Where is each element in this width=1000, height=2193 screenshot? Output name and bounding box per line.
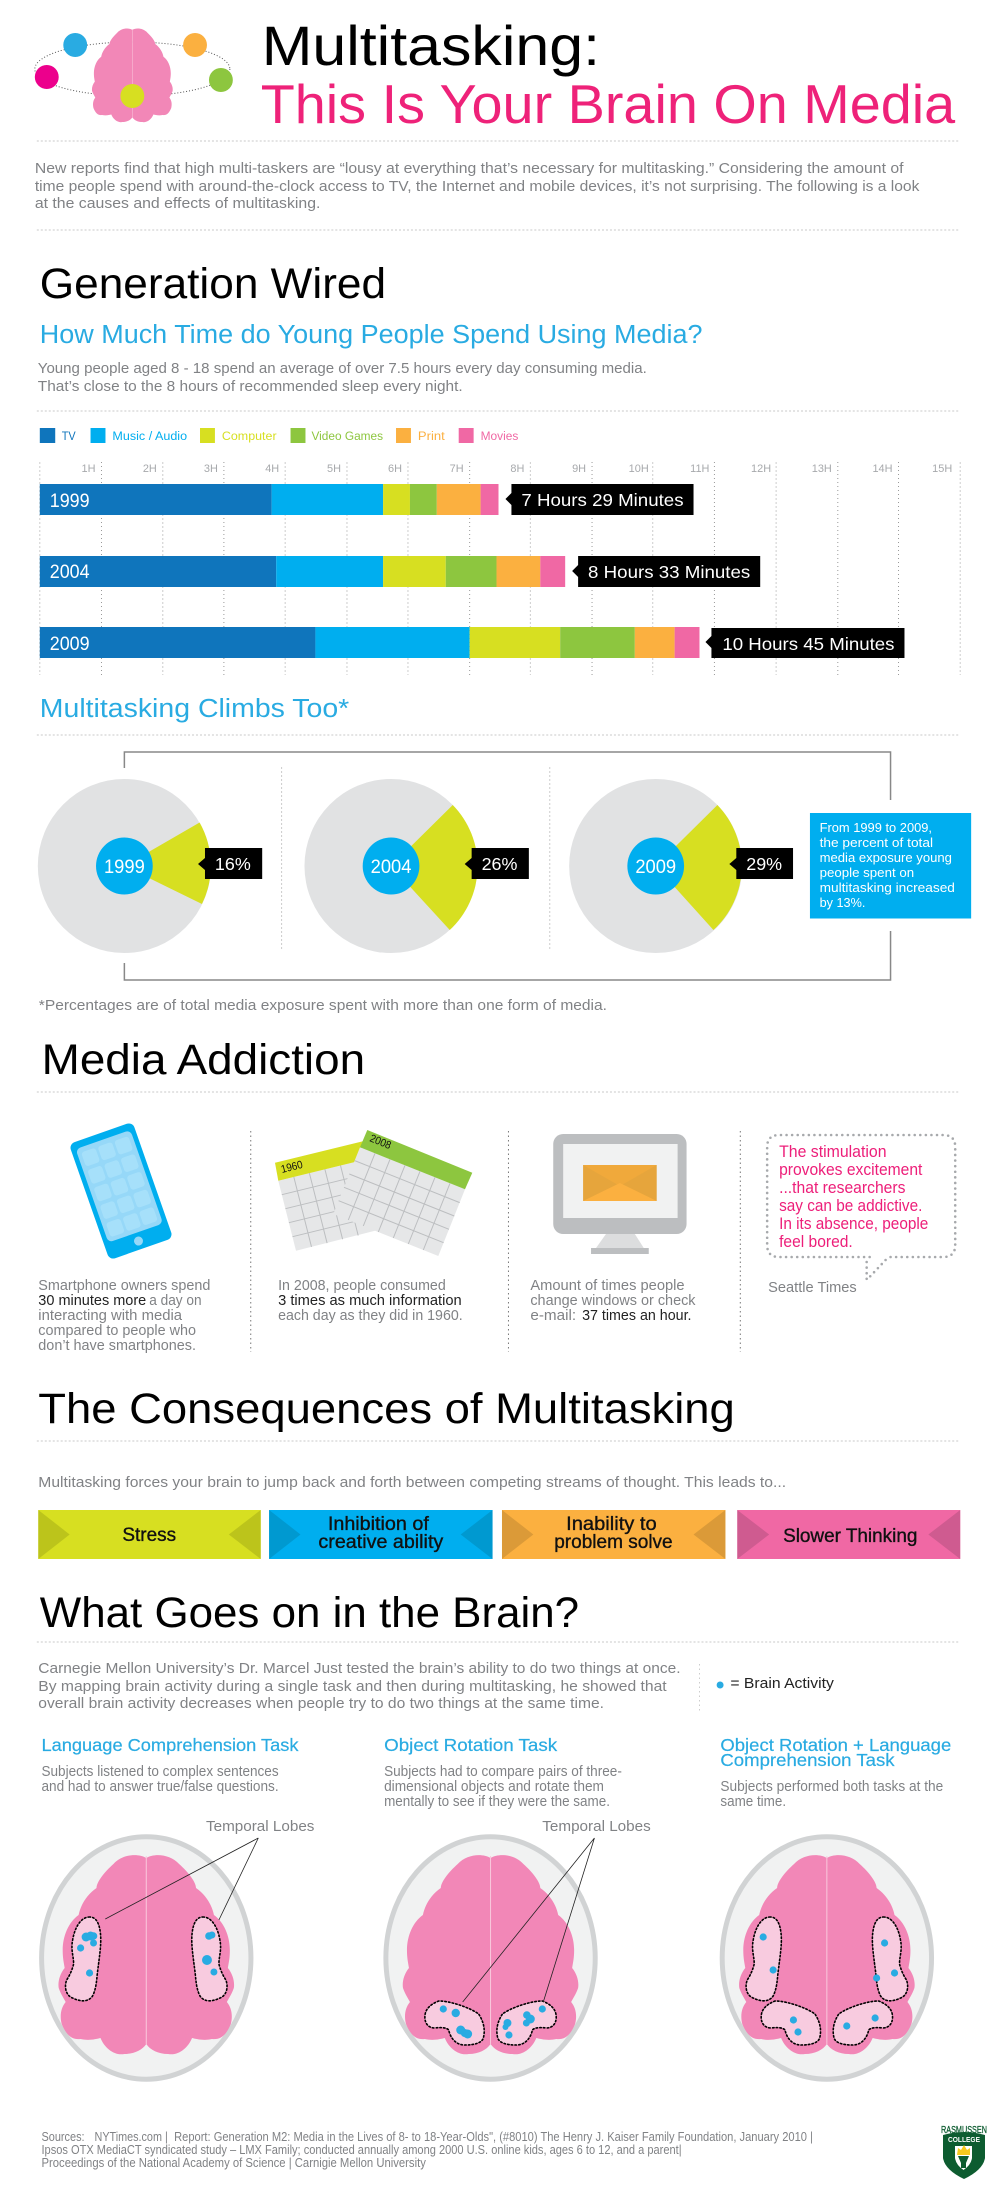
- text block: window changes: [530, 1278, 696, 1324]
- bar: 2004: 8 Hours 33 Minutes: [588, 562, 750, 582]
- intro text block: at the causes and effects of multitasking.: [35, 196, 320, 212]
- text block: window changes: change windows or check: [530, 1293, 696, 1309]
- bar chart: daily media hours: 4H: [265, 463, 279, 475]
- legend: brain activity: = Brain Activity: [730, 1676, 835, 1692]
- title: [261, 14, 956, 135]
- pie: 1999 16%: 16%: [215, 854, 251, 874]
- brain diagram: rotation task: [386, 1837, 595, 2079]
- sources footer: [41, 2130, 813, 2170]
- text block: 3 times as much: In 2008, people consumed: [278, 1278, 446, 1294]
- panel: combined task: same time.: [720, 1794, 786, 1810]
- text block: media hours: [38, 361, 647, 395]
- panel: object rotation task: mentally to see if they were the same.: [384, 1794, 610, 1810]
- sources footer: Proceedings of the National Academy of Science | Carnigie Mellon University: [41, 2156, 427, 2170]
- icon: smartphone: [69, 1122, 173, 1260]
- legend: Computer: [222, 429, 277, 443]
- bracket connecting pies: [124, 752, 891, 980]
- pie: 2004 26%: 2004: [371, 857, 411, 878]
- heading: The Consequences of Multitasking: The Consequences of Multitasking: [38, 1385, 735, 1433]
- bar: 2004: [40, 556, 760, 587]
- bar: 2009: 2009: [50, 634, 90, 655]
- bar chart: daily media hours: 12H: [751, 463, 771, 475]
- callout: 13% increase: media exposure young: [820, 850, 952, 865]
- icon: monitor with envelope: [553, 1134, 687, 1254]
- text block: Carnegie Mellon: Carnegie Mellon University’s Dr. Marcel Just tested the brain’s ability to do two things at once.: [38, 1661, 681, 1677]
- banner: Inhibition of creative ability: creative ability: [318, 1532, 444, 1553]
- bar chart: daily media hours: 5H: [327, 463, 341, 475]
- footnote: *Percentages are of total media exposure spent with more than one form of media.: [39, 998, 607, 1014]
- text block: smartphone owners: a day on: [149, 1293, 202, 1309]
- sources footer: Ipsos OTX MediaCT syndicated study – LMX Family; conducted annually among 2000 U.S. online kids, ages 6 to 12, and a parent|: [41, 2143, 682, 2157]
- pie: 1999 16%: 1999: [104, 857, 145, 878]
- bar: 2009: 10 Hours 45 Minutes: [722, 634, 895, 654]
- intro text block: [35, 161, 920, 212]
- pie: 1999 16%: [38, 779, 262, 953]
- panel: language comprehension task: Subjects listened to complex sentences: [41, 1764, 279, 1780]
- panel: object rotation task: dimensional objects and rotate them: [384, 1779, 604, 1795]
- panel: language comprehension task: [41, 1735, 314, 2079]
- bar: 1999: 1999: [50, 491, 90, 512]
- subheading: how much time: How Much Time do Young People Spend Using Media?: [40, 321, 702, 349]
- bar: 2009: [40, 627, 904, 658]
- text block: 3 times as much: each day as they did in 1960.: [278, 1308, 463, 1324]
- bar chart: daily media hours: 1H: [82, 463, 96, 475]
- text block: media hours: That’s close to the 8 hours of recommended sleep every night.: [38, 379, 463, 395]
- speech bubble: quote: ...that researchers: [779, 1178, 905, 1197]
- callout: 13% increase: by 13%.: [820, 895, 865, 910]
- banner: Inability to problem solve: Inability to: [566, 1514, 657, 1535]
- brain diagram: language task: [42, 1837, 258, 2079]
- legend: Movies: [481, 429, 518, 443]
- speech bubble: quote: In its absence, people: [779, 1214, 928, 1233]
- bar: 1999: [40, 484, 694, 515]
- text block: smartphone owners: Smartphone owners spend: [38, 1278, 210, 1294]
- pie: 2004 26%: 26%: [482, 854, 517, 874]
- bar chart: daily media hours: 11H: [690, 463, 710, 475]
- pie: 2009 29%: 2009: [635, 857, 676, 878]
- legend: TV: [62, 429, 76, 443]
- title: This Is Your Brain On Media: [261, 73, 956, 135]
- logo: Rasmussen College: COLLEGE: [948, 2137, 980, 2144]
- panel: combined task: Comprehension Task: [720, 1750, 895, 1770]
- panel: language comprehension task: Temporal Lobes: [206, 1819, 314, 1835]
- banner: Inhibition of creative ability: Inhibition of: [328, 1514, 430, 1535]
- icon: brain with orbiting media dots: [35, 29, 233, 122]
- callout: 13% increase: [810, 813, 971, 918]
- banner: Stress: Stress: [122, 1525, 176, 1546]
- callout: 13% increase: the percent of total: [820, 835, 933, 850]
- pie: 2004 26%: [304, 779, 529, 953]
- text block: window changes: 37 times an hour.: [582, 1308, 692, 1324]
- panel: language comprehension task: Language Comprehension Task: [41, 1735, 299, 1755]
- text block: smartphone owners: compared to people who: [38, 1323, 196, 1339]
- callout: 13% increase: From 1999 to 2009,: [820, 820, 932, 835]
- text block: Carnegie Mellon: By mapping brain activity during a single task and then during multitasking, he showed that: [38, 1679, 667, 1695]
- banner: Slower Thinking: Slower Thinking: [783, 1526, 917, 1547]
- heading: Generation Wired: Generation Wired: [40, 260, 386, 308]
- bar chart: daily media hours: 13H: [812, 463, 832, 475]
- bar chart: daily media hours: 6H: [388, 463, 402, 475]
- legend: [40, 428, 518, 443]
- sources footer: Report: Generation M2: Media in the Lives of 8- to 18-Year-Olds", (#8010) The Henry J. Kaiser Family Foundation, January 2010 |: [174, 2130, 813, 2144]
- callout: 13% increase: multitasking increased: [820, 880, 955, 895]
- pie: 2009 29%: [569, 779, 793, 953]
- text block: window changes: e-mail:: [530, 1308, 576, 1324]
- text block: window changes: Amount of times people: [530, 1278, 685, 1294]
- text block: media hours: Young people aged 8 - 18 spend an average of over 7.5 hours every day consuming media.: [38, 361, 647, 377]
- text block: Carnegie Mellon: overall brain activity decreases when people try to do two things at the same time.: [38, 1696, 604, 1712]
- legend: Music / Audio: [112, 429, 187, 443]
- text block: smartphone owners: interacting with media: [38, 1308, 183, 1324]
- icon: overlapping calendars 1960 and 2008: [275, 1130, 472, 1256]
- logo: Rasmussen College: [941, 2125, 987, 2179]
- bar: 2004: 2004: [50, 562, 90, 583]
- panel: object rotation task: Object Rotation Task: [384, 1735, 557, 1755]
- banner: Slower Thinking: [737, 1510, 960, 1559]
- speech bubble: quote: [767, 1135, 955, 1282]
- legend: Print: [418, 429, 445, 443]
- bar chart: daily media hours: [40, 462, 960, 675]
- sources footer: NYTimes.com |: [95, 2130, 168, 2144]
- subheading: multitasking climbs: Multitasking Climbs Too*: [40, 695, 349, 723]
- banner: Inability to problem solve: [502, 1510, 725, 1559]
- text block: smartphone owners: don’t have smartphones.: [38, 1338, 196, 1354]
- bar chart: daily media hours: 15H: [932, 463, 952, 475]
- banner: Stress: [38, 1510, 261, 1559]
- bar chart: daily media hours: 10H: [629, 463, 649, 475]
- text block: smartphone owners: 30 minutes more: [38, 1293, 146, 1309]
- pie: 2009 29%: 29%: [746, 854, 782, 874]
- text block: 3 times as much: 3 times as much information: [278, 1293, 462, 1309]
- icon: overlapping calendars 1960 and 2008: 1960: [280, 1159, 304, 1176]
- legend: Video Games: [311, 429, 383, 443]
- bar chart: daily media hours: 7H: [450, 463, 464, 475]
- heading: Media Addiction: Media Addiction: [42, 1036, 365, 1084]
- panel: combined task: Object Rotation + Language: [720, 1735, 951, 1755]
- callout: 13% increase: people spent on: [820, 865, 914, 880]
- title: Multitasking:: [262, 14, 600, 77]
- bar chart: daily media hours: 14H: [872, 463, 893, 475]
- text: multitasking forces: Multitasking forces your brain to jump back and forth between competing streams of thought. This leads to...: [38, 1475, 786, 1491]
- bar chart: daily media hours: 2H: [143, 463, 157, 475]
- panel: combined task: [720, 1735, 951, 2079]
- bar chart: daily media hours: 8H: [510, 463, 524, 475]
- bar chart: daily media hours: 9H: [572, 463, 586, 475]
- text block: Carnegie Mellon: [38, 1661, 681, 1712]
- icon: overlapping calendars 1960 and 2008: 2008: [368, 1133, 393, 1152]
- panel: object rotation task: [384, 1735, 651, 2079]
- panel: object rotation task: Temporal Lobes: [542, 1819, 651, 1835]
- banner: Inability to problem solve: problem solve: [554, 1532, 673, 1553]
- speech bubble: quote: feel bored.: [779, 1232, 853, 1251]
- panel: combined task: Subjects performed both tasks at the: [720, 1779, 943, 1795]
- brain diagram: combined task: [722, 1837, 932, 2079]
- text block: smartphone owners: [38, 1278, 210, 1354]
- source: Seattle Times: Seattle Times: [768, 1280, 857, 1296]
- panel: object rotation task: Subjects had to compare pairs of three-: [384, 1764, 622, 1780]
- heading: What Goes on in the Brain?: What Goes on in the Brain?: [40, 1589, 579, 1637]
- intro text block: New reports find that high multi-taskers are “lousy at everything that’s necessary for multitasking.” Considering the amount of: [35, 161, 905, 177]
- bar: 1999: 7 Hours 29 Minutes: [521, 490, 684, 510]
- panel: language comprehension task: and had to answer true/false questions.: [41, 1779, 279, 1795]
- text block: 3 times as much: [278, 1278, 463, 1324]
- bar chart: daily media hours: 3H: [204, 463, 218, 475]
- banner: Inhibition of creative ability: [269, 1510, 493, 1559]
- speech bubble: quote: The stimulation: [779, 1142, 887, 1161]
- sources footer: Sources:: [41, 2130, 85, 2144]
- speech bubble: quote: provokes excitement: [779, 1160, 923, 1179]
- speech bubble: quote: say can be addictive.: [779, 1196, 922, 1215]
- intro text block: time people spend with around-the-clock access to TV, the Internet and mobile devices, it’s not surprising. The following is a look: [35, 179, 920, 195]
